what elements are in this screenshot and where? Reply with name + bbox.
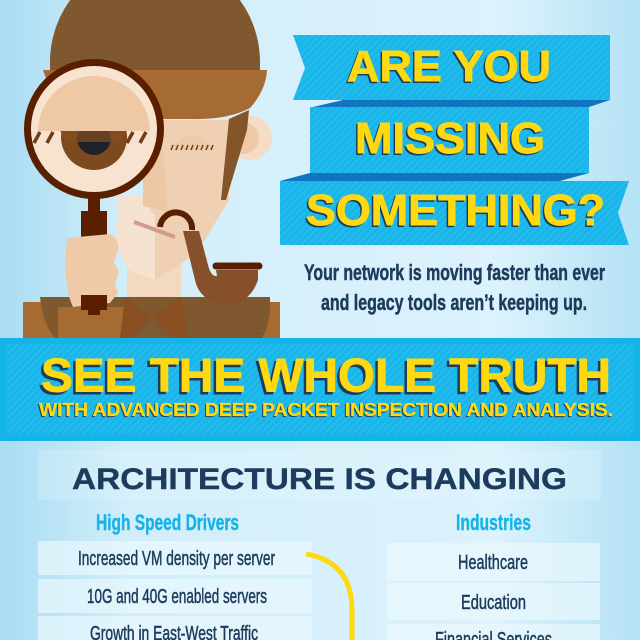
ribbon 3: SOMETHING? [304,188,604,236]
neck and jacket [23,262,280,338]
row [387,543,600,581]
row [387,583,600,620]
ribbon 1: ARE YOU [347,42,551,91]
nose [143,150,168,212]
column: high speed drivers: High Speed Drivers [96,510,239,535]
magnifying glass [28,62,160,239]
section title [38,450,601,500]
row: 10G and 40G enabled servers [87,586,267,608]
connector arrow [306,554,352,640]
face [116,110,272,280]
banner headline: SEE THE WHOLE TRUTH [38,351,608,404]
illustration: detective [23,0,280,338]
ribbon 1: ARE YOU [346,44,550,92]
column: high speed drivers [38,510,312,640]
banner subline: WITH ADVANCED DEEP PACKET INSPECTION AND ANALYSIS. [39,400,613,420]
eyebrow blob [171,136,214,150]
column: industries [387,510,600,640]
row [38,541,312,575]
ribbon 2 [310,107,589,173]
ribbon folds [280,100,610,181]
subheading [304,260,605,315]
pipe [134,212,259,304]
right-eye lashes [171,145,213,150]
section title: ARCHITECTURE IS CHANGING [72,463,567,496]
ribbon 1 [293,35,610,100]
row [38,616,312,640]
ribbon 2: MISSING [354,116,544,164]
row [387,624,600,640]
column: industries: Industries [456,510,531,535]
row [38,579,312,613]
ear [228,116,272,160]
banner subline: WITH ADVANCED DEEP PACKET INSPECTION AND ANALYSIS. [38,401,612,421]
ribbon headline [280,35,629,245]
ribbon 3: SOMETHING? [306,186,605,235]
hand [65,234,119,315]
hat [43,0,267,119]
ribbon 2: MISSING [355,114,545,163]
row: Healthcare [458,552,528,574]
ribbon 3 [280,181,629,245]
row: Education [461,592,526,614]
row: Increased VM density per server [78,548,275,570]
lower face light [116,195,155,280]
banner [0,338,640,441]
sideburn [221,110,249,200]
banner headline: SEE THE WHOLE TRUTH [41,348,611,402]
